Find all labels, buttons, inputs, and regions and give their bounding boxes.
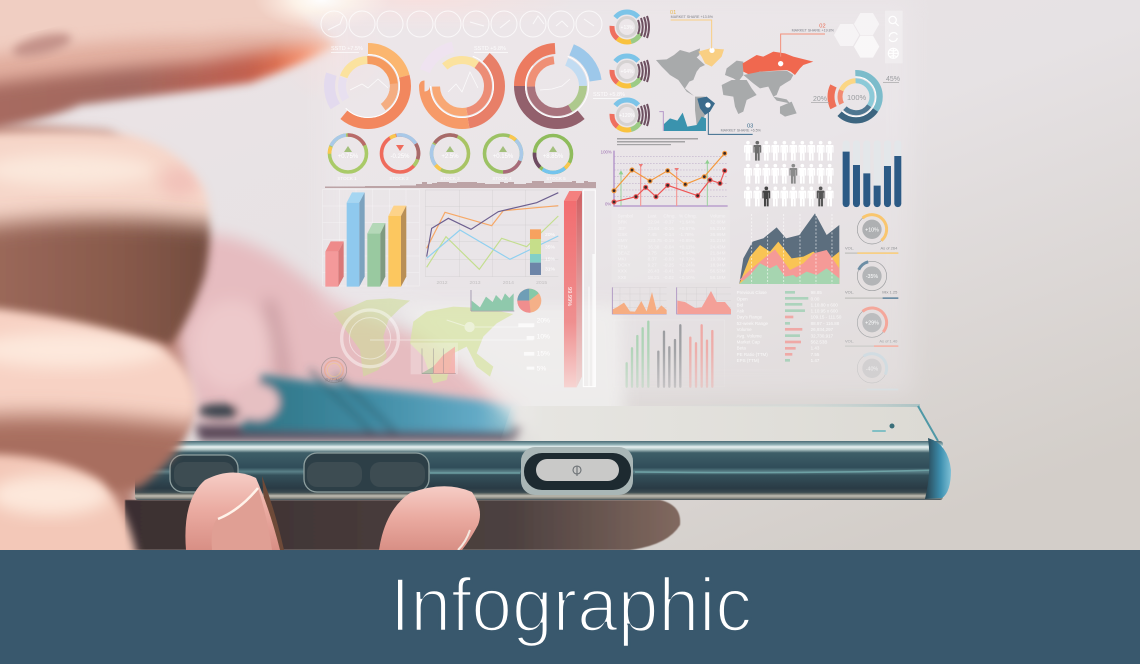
stock 5 — [528, 129, 578, 179]
stock table: Chng. — [663, 213, 676, 218]
radial donut values: +13% — [621, 25, 634, 31]
stats list: 562.53B — [811, 340, 827, 345]
stock 2 — [375, 128, 425, 179]
rating gauge — [321, 357, 347, 383]
clock gauges row — [321, 11, 602, 37]
gauge 3: +29%: +29% — [865, 321, 879, 327]
teal area chart on map — [659, 112, 706, 131]
blue capsule bars — [843, 140, 901, 207]
stock labels: STOCK 3 — [440, 176, 460, 181]
stats list: 26,934,297 — [811, 327, 834, 332]
stock table: Last — [648, 213, 657, 218]
line chart legend: 15% — [545, 257, 556, 263]
donut centre sparklines — [350, 72, 570, 92]
stock table: -0.16 — [663, 226, 674, 231]
stock labels: STOCK 5 — [546, 176, 566, 181]
blurred screen reflection — [195, 370, 525, 441]
stock table: +5.64% — [679, 250, 695, 255]
stock 3: +2.5% — [441, 154, 459, 160]
stock table: DCKY — [618, 262, 631, 267]
multi-line chart — [425, 190, 558, 286]
three small radial donuts — [612, 12, 649, 130]
stock table: MKI — [618, 256, 626, 261]
donut annotations: SSTD +5.8% — [593, 92, 625, 98]
stock donut row — [323, 128, 578, 179]
stock labels: STOCK 2 — [389, 176, 409, 181]
stock table: -0.41 — [663, 269, 674, 274]
small red area chart — [411, 343, 458, 374]
100 percent donut labels: 100% — [847, 93, 867, 102]
stock table: -0.04 — [663, 244, 674, 249]
world map — [656, 20, 825, 134]
multi-line chart: 2012 — [436, 280, 448, 286]
stock table: 3.75 — [648, 250, 657, 255]
stock table: +0.10% — [679, 275, 695, 280]
stock table: 26.43 — [648, 269, 660, 274]
bottom banner — [0, 550, 1140, 664]
volume key left — [170, 455, 238, 492]
stock table: TEM — [618, 244, 628, 249]
stats list: 98.85 — [811, 290, 822, 295]
third finger in foreground — [0, 303, 200, 493]
stock table: +0.32% — [679, 256, 695, 261]
gauge 2: -35%: VOL. — [845, 290, 854, 295]
map callouts: MARKET SHARE +6.5% — [721, 129, 762, 133]
donut annotations — [331, 46, 625, 99]
people pictogram — [744, 141, 834, 206]
bar strip above charts — [325, 181, 596, 188]
stock table: 55.21M — [710, 226, 726, 231]
stock table: 8.37 — [648, 256, 657, 261]
stats list: Beta — [737, 346, 746, 351]
gauge 2: -35%: Mix 1.25 — [882, 290, 898, 295]
3D bar chart — [323, 189, 419, 287]
radial donut values: +64% — [621, 69, 634, 75]
world map chart with percentages: 15% — [537, 350, 550, 357]
stock table: 18.21 — [648, 275, 660, 280]
large donut 3 — [518, 47, 596, 125]
stock table: XXX — [618, 269, 628, 274]
multi-line chart: 2013 — [469, 280, 481, 286]
screen front camera — [872, 424, 894, 432]
stock table: 32.88M — [710, 220, 726, 225]
double key — [304, 453, 429, 492]
line chart legend: 31% — [545, 267, 556, 273]
stock table: 23.64 — [648, 226, 660, 231]
stats list: 1.43 — [811, 346, 820, 351]
stock table: +2.24% — [679, 262, 695, 267]
blurred rear hand — [175, 233, 525, 430]
large donut 1 — [330, 48, 406, 124]
world map chart with percentages: 20% — [537, 318, 550, 325]
lens flare on fingertip — [254, 0, 575, 105]
map callouts: MARKET SHARE +13.5% — [671, 15, 714, 19]
gauge 3: +29% — [845, 302, 898, 347]
stats list: Previous Close — [737, 290, 767, 295]
stock table: 56.53M — [710, 269, 726, 274]
stock table: 24.43M — [710, 244, 726, 249]
index fingertip — [379, 486, 480, 550]
header bars above line chart — [617, 138, 698, 145]
stock table: -0.14 — [663, 232, 674, 237]
map callouts: 03 — [747, 123, 753, 129]
stock table: 19.39M — [710, 256, 726, 261]
stock labels: STOCK 1 — [337, 176, 357, 181]
stock table: 31.21M — [710, 238, 726, 243]
stock table: 21.84M — [710, 250, 726, 255]
stock 2: -0.25% — [390, 154, 410, 160]
gauge 1: +10%: VOL. — [845, 246, 854, 251]
stock table: +1.64% — [679, 220, 695, 225]
stock table: +1.56% — [679, 269, 695, 274]
screen right edge — [918, 406, 938, 441]
stock table: +0.67% — [679, 226, 695, 231]
stock 4: +0.15% — [493, 154, 514, 160]
stock labels: STOCK 4 — [492, 176, 512, 181]
stats list — [737, 290, 842, 363]
gauge 4: -40% — [845, 348, 898, 390]
stats list: Ask — [737, 309, 745, 314]
stacked mountain chart — [739, 213, 839, 284]
stats list: Market Cap — [737, 340, 760, 345]
stock 1 — [323, 128, 373, 179]
gauge 3: +29%: As of 1.40 — [879, 338, 898, 343]
multi-line chart: 2014 — [503, 280, 514, 286]
screen top edge — [680, 404, 920, 407]
stock table: 7.45 — [648, 232, 657, 237]
map callouts: 01 — [670, 10, 676, 16]
stock table: GSK — [618, 232, 628, 237]
markers line chart: 100% — [601, 149, 612, 154]
stock table: Symbol — [618, 213, 633, 218]
stats list: Open — [737, 296, 748, 301]
phone end cap — [925, 438, 951, 499]
red tall 3D bar: 99.99% — [566, 287, 572, 306]
stock table — [612, 210, 730, 283]
smartphone — [125, 404, 951, 550]
stats list: 1.10.80 x 600 — [811, 302, 838, 307]
stock table: -0.03 — [663, 256, 674, 261]
stock table: -0.02 — [663, 275, 674, 280]
hologram dashboard — [321, 0, 912, 432]
gauge 1: +10%: +10% — [865, 227, 879, 233]
hologram light fade over hand — [395, 305, 625, 432]
hologram soft panel — [322, 0, 912, 395]
stats list: 52-week Range — [737, 321, 769, 326]
hexagons and toolbar — [834, 11, 903, 63]
stock table: +0.11% — [679, 244, 695, 249]
stats list: 0.00 — [811, 296, 820, 301]
small orange area chart — [612, 287, 667, 314]
stats list: 88.97 - 116.88 — [811, 321, 840, 326]
100 percent donut — [831, 72, 881, 122]
line chart legend: 20% — [545, 232, 556, 238]
red tall 3D bar — [564, 190, 595, 387]
stats list: Volume — [737, 327, 752, 332]
stats list: Bid — [737, 302, 744, 307]
second finger — [0, 127, 216, 348]
gauge 1: +10% — [845, 209, 898, 254]
stock table: BEAZ — [618, 250, 630, 255]
hand palm under phone — [125, 500, 680, 550]
phone screen surface — [500, 406, 936, 441]
stock table: BRK — [618, 220, 628, 225]
stock table: -0.25 — [663, 262, 674, 267]
power button — [521, 447, 633, 495]
stock table: Volume — [710, 213, 726, 218]
stats list: 32,730,917 — [811, 333, 834, 338]
multi-line chart: 2015 — [536, 280, 547, 286]
map callouts: MARKET SHARE +19.8% — [792, 28, 835, 32]
donut annotations: SSTD +7.5% — [331, 46, 363, 52]
stats list: PE Ratio (TTM) — [737, 352, 768, 357]
gauge 2: -35%: -35% — [866, 274, 878, 280]
markers line chart: 0% — [605, 201, 611, 206]
stock 5: +8.85% — [543, 154, 564, 160]
stock table: 223.75 — [648, 238, 662, 243]
stock table: 18.94M — [710, 262, 726, 267]
stock table: -0.22 — [663, 250, 674, 255]
stats list: 1.47 — [811, 358, 820, 363]
world map chart with percentages: 10% — [537, 334, 550, 341]
stock table: 36.38 — [648, 244, 660, 249]
gauge 4: -40%: -40% — [866, 366, 878, 372]
banner title: Infographic — [390, 563, 752, 648]
pointing finger — [0, 0, 337, 130]
stock table: 58.18M — [710, 275, 726, 280]
stock table: -0.37 — [663, 220, 674, 225]
radial donut values — [619, 25, 635, 119]
mini area chart with pie — [471, 289, 541, 313]
phone body — [135, 441, 943, 500]
markers line chart — [601, 149, 728, 206]
stats list: EPS (TTM) — [737, 358, 760, 363]
stats list: Avg. Volume — [737, 333, 762, 338]
world map chart with percentages — [333, 298, 550, 383]
small salmon area chart — [677, 287, 731, 314]
large donut 2 — [422, 46, 502, 126]
donut annotations: SSTD +5.8% — [474, 46, 506, 52]
100 percent donut labels: 45% — [886, 76, 900, 83]
stats list: Day's Range — [737, 315, 763, 320]
stock 3 — [425, 128, 475, 179]
body streak — [430, 470, 935, 473]
stock labels — [337, 176, 566, 181]
stock table: 22.94 — [648, 220, 660, 225]
gauge 1: +10%: As of 264 — [880, 246, 898, 251]
gauge 3: +29%: VOL. — [845, 338, 854, 343]
faded column chart — [626, 320, 714, 388]
stock table: -0.19 — [663, 238, 674, 243]
world map chart with percentages: 5% — [537, 366, 546, 373]
stats list: 109.15 - 111.50 — [811, 315, 842, 320]
stock 4 — [478, 128, 528, 179]
line chart legend: 35% — [545, 245, 556, 251]
fourth finger in foreground — [0, 449, 142, 550]
stats list: 1.10.95 x 600 — [811, 309, 838, 314]
stock table: % Chng. — [679, 213, 697, 218]
100 percent donut labels: 20% — [813, 96, 827, 103]
thumb — [185, 472, 284, 550]
stock table: 36.99M — [710, 232, 726, 237]
stock table: +0.89% — [679, 238, 695, 243]
map callouts: 02 — [819, 23, 826, 29]
stock table: XXII — [618, 275, 626, 280]
100 percent donut labels — [811, 76, 900, 103]
rating gauge: RATING — [325, 377, 343, 382]
gauge 2: -35% — [845, 257, 898, 299]
stock table: SMY — [618, 238, 628, 243]
stock table: 9.27 — [648, 262, 657, 267]
stock 1: +0.75% — [338, 154, 359, 160]
stock table: -1.78% — [679, 232, 694, 237]
map callouts — [670, 10, 835, 133]
radial donut values: +120% — [619, 113, 635, 119]
finger shadow backing — [0, 122, 190, 560]
line chart legend — [530, 229, 556, 275]
stats list: 7.55 — [811, 352, 820, 357]
stock table: JEF — [618, 226, 626, 231]
